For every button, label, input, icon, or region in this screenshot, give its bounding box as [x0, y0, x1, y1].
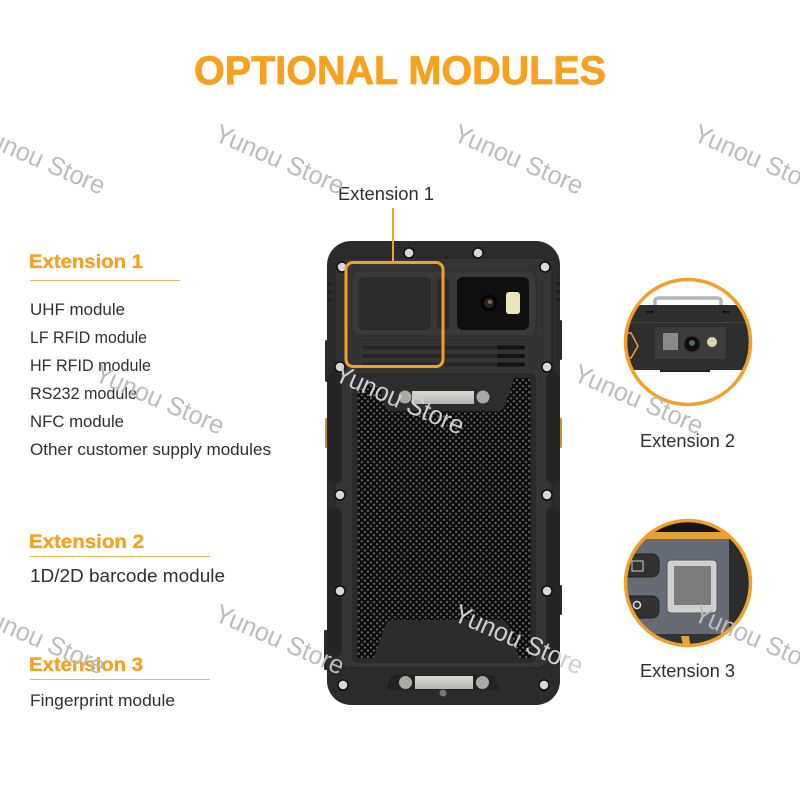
heading: extension 1: Extension 1 — [29, 252, 143, 273]
watermarks: Yunou Store — [211, 118, 349, 201]
list: extension 1 modules: Other customer supply modules — [30, 440, 271, 459]
watermarks: Yunou Store — [450, 598, 588, 681]
heading: extension 3: Extension 3 — [29, 655, 143, 676]
panel: left module list — [29, 252, 271, 710]
watermarks: Yunou Store — [91, 358, 229, 441]
watermarks — [0, 118, 800, 681]
side slot — [437, 277, 449, 330]
carbon mesh — [358, 378, 530, 658]
list: extension 1 modules: LF RFID module — [30, 328, 147, 347]
detail circle: extension 3 — [620, 518, 760, 650]
phone illustration — [324, 241, 562, 705]
speaker vents — [362, 346, 525, 366]
label: extension 3: Extension 3 — [640, 661, 735, 681]
list: extension 1 modules: RS232 module — [30, 384, 137, 403]
list: extension 1 modules — [30, 300, 271, 459]
phone side buttons — [324, 320, 562, 670]
watermarks: Yunou Store — [211, 598, 349, 681]
title: OPTIONAL MODULES — [194, 49, 606, 93]
module bay: extension 1 — [358, 277, 431, 330]
carbon back panel — [351, 372, 537, 664]
upper connector — [398, 390, 490, 404]
side bumpers — [327, 372, 560, 657]
bottom connector — [386, 675, 500, 696]
camera module — [457, 277, 529, 330]
lower bracket — [373, 620, 520, 660]
rear top housing — [352, 271, 536, 336]
list: extension 1 modules: UHF module — [30, 300, 125, 319]
list: extension 1 modules: NFC module — [30, 412, 124, 431]
text: extension 3 module: Fingerprint module — [30, 691, 175, 710]
watermarks: Yunou Store — [450, 118, 588, 201]
heading: extension 2: Extension 2 — [29, 532, 144, 553]
phone body — [327, 241, 560, 705]
phone inner frame — [335, 258, 552, 668]
detail circle: extension 2 — [620, 280, 760, 404]
callout: extension 1 label: Extension 1 — [338, 184, 434, 204]
label: extension 2: Extension 2 — [640, 431, 735, 451]
text: extension 2 module: 1D/2D barcode module — [30, 566, 225, 586]
screws — [335, 248, 552, 690]
upper bracket — [357, 377, 531, 411]
top grip ridges — [327, 282, 560, 301]
watermarks: Yunou Store — [331, 358, 469, 441]
callout: extension 1 label — [338, 184, 443, 366]
watermarks: Yunou Store — [570, 358, 708, 441]
list: extension 1 modules: HF RFID module — [30, 356, 151, 375]
